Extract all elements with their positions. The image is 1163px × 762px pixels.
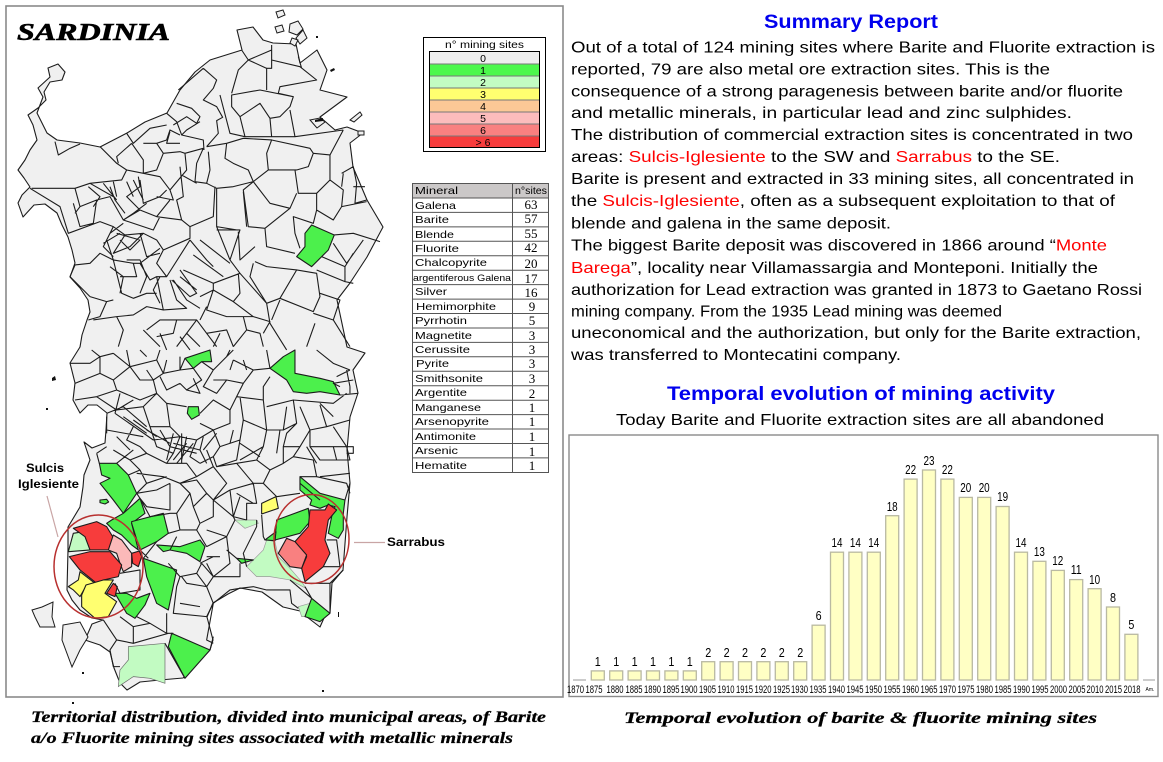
municipal boundaries, north	[30, 45, 380, 350]
bar chart: mining sites by year: 1	[650, 654, 656, 669]
leader line: Sulcis Iglesiente	[47, 496, 58, 537]
legend: number of mining sites	[424, 38, 546, 152]
bar chart: mining sites by year: 2	[724, 645, 730, 660]
bar chart: mining sites by year: 13	[1034, 544, 1045, 559]
bar chart: mining sites by year: 1960	[902, 684, 919, 696]
text block: summary report: the Sulcis-Iglesiente , often as a subsequent exploitation to that of	[571, 193, 1116, 210]
leader line: Sarrabus	[354, 542, 385, 544]
bar chart: mining sites by year: 1	[687, 654, 693, 669]
text block: summary report: mining company. From the 1935 Lead mining was deemed	[571, 304, 1002, 320]
table: minerals and number of sites: Pyrrhotin	[415, 315, 467, 327]
bar chart: mining sites by year: 1955	[884, 684, 900, 696]
table: minerals and number of sites: 1	[529, 458, 535, 473]
map: Sardinia municipal areas	[18, 10, 383, 704]
bar chart: mining sites by year: 2005	[1068, 684, 1086, 696]
caption: chart: Temporal evolution of barite & fluorite mining sites	[624, 710, 1097, 727]
table: minerals and number of sites: 3	[529, 342, 535, 357]
legend: number of mining sites: > 6	[476, 137, 491, 149]
bar chart: mining sites by year: 1915	[736, 684, 753, 696]
table: minerals and number of sites: Magnetite	[415, 330, 472, 342]
bar chart: mining sites by year: 14	[1016, 535, 1026, 550]
island outline	[18, 27, 383, 690]
table: minerals and number of sites: 2	[529, 386, 535, 401]
caption: map: a/o Fluorite mining sites associated with metallic minerals	[31, 730, 513, 747]
table: minerals and number of sites: 1	[529, 429, 535, 444]
table: minerals and number of sites: Hemimorphite	[416, 301, 496, 313]
bar chart: mining sites by year: 2018	[1124, 684, 1140, 696]
bar chart: mining sites by year: 1	[668, 654, 674, 669]
table: minerals and number of sites: 1	[529, 400, 535, 415]
bar chart: mining sites by year: 1920	[754, 684, 772, 696]
bar chart: mining sites by year: 12	[1052, 553, 1063, 568]
label: Sulcis Iglesiente: Sulcis	[26, 461, 64, 475]
text block: summary report	[570, 40, 1155, 364]
text block: summary report: and metallic minerals, in particular lead and zinc sulphides.	[571, 105, 1072, 122]
table: minerals and number of sites: Arsenopyrite	[415, 416, 489, 428]
table: minerals and number of sites: Pyrite	[416, 358, 449, 370]
caption: map: Territorial distribution, divided into municipal areas, of Barite	[31, 709, 546, 726]
text block: summary report: blende and galena in the same deposit.	[571, 216, 891, 232]
bar chart: mining sites by year: 2	[705, 645, 711, 660]
text block: summary report: was transferred to Montecatini company.	[570, 347, 901, 364]
text block: summary report: The biggest Barite deposit was discovered in 1866 around “ Monte	[571, 238, 1107, 254]
table: minerals and number of sites: 5	[529, 313, 535, 328]
table: minerals and number of sites: 42	[524, 240, 538, 255]
caption: map	[31, 709, 546, 747]
bar chart: mining sites by year: 1	[595, 654, 601, 669]
municipal area: green, north-east	[297, 225, 334, 267]
bar chart: mining sites by year: 23	[924, 453, 934, 468]
bar chart: mining sites by year: 14	[850, 535, 861, 550]
text block: summary report: areas: Sulcis-Iglesiente to the SW and Sarrabus to the SE.	[571, 149, 1060, 166]
bar chart: mining sites by year: 1910	[718, 684, 734, 696]
legend: number of mining sites: 4	[480, 101, 486, 113]
label: Sulcis Iglesiente: Iglesiente	[18, 477, 79, 491]
callout: Sarrabus circle	[274, 494, 349, 584]
bar chart: mining sites by year: 2015	[1105, 684, 1122, 696]
legend: number of mining sites: 6	[480, 125, 486, 137]
bar chart: mining sites by year: 1980	[976, 684, 993, 696]
table: minerals and number of sites: 1	[529, 414, 535, 429]
table: minerals and number of sites: Manganese	[415, 402, 481, 414]
table: minerals and number of sites: Chalcopyrite	[415, 257, 487, 269]
table: minerals and number of sites: Galena	[415, 200, 456, 212]
bar chart: mining sites by year: 1940	[828, 684, 845, 696]
bar chart: mining sites by year: 1930	[791, 684, 808, 696]
bar chart: mining sites by year: 1950	[865, 684, 882, 696]
table: minerals and number of sites: 55	[524, 226, 538, 241]
bar chart: mining sites by year: 5	[1128, 617, 1134, 632]
bar chart: mining sites by year: 2	[742, 645, 748, 660]
table: minerals and number of sites: Mineral	[415, 185, 458, 197]
bar chart: mining sites by year: 2000	[1050, 684, 1067, 696]
table: minerals and number of sites: Fluorite	[415, 243, 459, 255]
text block: summary report: uneconomical and the authorization, but only for the Barite extraction,	[571, 325, 1141, 342]
bar chart: mining sites by year: 1870	[567, 684, 584, 696]
table: minerals and number of sites	[412, 184, 548, 473]
label: Sulcis Iglesiente	[18, 461, 79, 491]
bar chart: mining sites by year	[567, 453, 1155, 696]
panel: map frame	[6, 6, 563, 697]
bar chart: mining sites by year: 14	[832, 535, 842, 550]
bar chart: mining sites by year: 1	[613, 654, 619, 669]
table: minerals and number of sites: 57	[524, 211, 538, 226]
table: minerals and number of sites: 16	[524, 285, 538, 300]
table: minerals and number of sites: Silver	[415, 286, 448, 298]
bar chart: mining sites by year: 1885	[626, 684, 642, 696]
bar chart: mining sites by year: 18	[887, 499, 898, 514]
bar chart: mining sites by year: 10	[1089, 572, 1100, 587]
bar chart: mining sites by year: 8	[1110, 590, 1116, 605]
table: minerals and number of sites: n°sites	[515, 185, 547, 197]
islets and dots	[46, 36, 339, 704]
bar chart: mining sites by year: 1875	[586, 684, 602, 696]
text block: summary report: Barega ”, locality near Villamassargia and Monteponi. Initially the	[571, 260, 1098, 277]
table: minerals and number of sites: Barite	[415, 214, 449, 226]
bar chart: mining sites by year: 1990	[1013, 684, 1030, 696]
bar chart: mining sites by year: 1965	[920, 684, 938, 696]
legend: number of mining sites: 1	[480, 65, 486, 77]
bar chart: mining sites by year: 19	[997, 489, 1008, 504]
callout: Sulcis Iglesiente circle	[54, 515, 143, 618]
table: minerals and number of sites: 1	[529, 444, 535, 459]
legend: number of mining sites: 3	[480, 89, 486, 101]
table: minerals and number of sites: Hematite	[415, 460, 467, 472]
panel: bar chart frame	[569, 435, 1158, 696]
small islands	[32, 10, 364, 667]
bar chart: mining sites by year: 2	[760, 645, 766, 660]
table: minerals and number of sites: 20	[524, 256, 538, 271]
text block: summary report: authorization for Lead extraction was granted in 1873 to Gaetano Rossi	[571, 282, 1142, 299]
table: minerals and number of sites: 3	[529, 371, 535, 386]
bar chart: mining sites by year: 20	[979, 480, 990, 495]
table: minerals and number of sites: 9	[529, 299, 535, 314]
text block: summary report: reported, 79 are also metal ore extraction sites. This is the	[571, 62, 1050, 78]
table: minerals and number of sites: Argentite	[415, 387, 467, 399]
table: minerals and number of sites: Antimonite	[415, 431, 476, 443]
text block: summary report: consequence of a strong paragenesis between barite and/or fluorite	[571, 84, 1123, 100]
coloured municipalities, centre and south	[68, 350, 345, 687]
label: Sarrabus: Sarrabus	[387, 535, 445, 549]
table: minerals and number of sites: 3	[529, 328, 535, 343]
table: minerals and number of sites: Blende	[415, 229, 454, 241]
text block: summary report: Out of a total of 124 mining sites where Barite and Fluorite extraction is	[571, 40, 1155, 56]
subheading: abandoned sites: Today Barite and Fluorite extraction sites are all abandoned	[616, 412, 1104, 429]
bar chart: mining sites by year: 2	[779, 645, 785, 660]
bar chart: mining sites by year: 1970	[939, 684, 956, 696]
bar chart: mining sites by year: 1975	[958, 684, 974, 696]
bar chart: mining sites by year: 1900	[680, 684, 698, 696]
bar chart: mining sites by year: 2	[797, 645, 803, 660]
bar chart: mining sites by year: 1905	[699, 684, 716, 696]
text block: summary report: Barite is present and extracted in 33 mining sites, all concentrated in	[571, 171, 1134, 188]
table: minerals and number of sites: 63	[524, 197, 538, 212]
bar chart: mining sites by year: 1880	[606, 684, 624, 696]
bar chart: mining sites by year: 20	[960, 480, 971, 495]
bar chart: mining sites by year: 1995	[1032, 684, 1048, 696]
legend: number of mining sites: 2	[480, 77, 486, 89]
table: minerals and number of sites: 3	[529, 356, 535, 371]
text block: summary report: The distribution of commercial extraction sites is concentrated in two	[571, 127, 1133, 144]
table: minerals and number of sites: 17	[524, 271, 538, 286]
table: minerals and number of sites: Cerussite	[415, 344, 470, 356]
bar chart: mining sites by year: 22	[942, 462, 953, 477]
title: SARDINIA: SARDINIA	[17, 20, 170, 46]
bar chart: mining sites by year: 1935	[810, 684, 826, 696]
bar chart: mining sites by year: 1895	[662, 684, 680, 696]
heading: Temporal evolution of mining activity: Temporal evolution of mining activity	[667, 384, 1055, 405]
bar chart: mining sites by year: 6	[816, 608, 822, 623]
bar chart: mining sites by year: 1945	[846, 684, 864, 696]
bar chart: mining sites by year: 1890	[644, 684, 661, 696]
table: minerals and number of sites: Arsenic	[415, 445, 458, 457]
bar chart: mining sites by year: 11	[1071, 562, 1082, 577]
legend: number of mining sites: 5	[480, 113, 486, 125]
legend: number of mining sites: n° mining sites	[445, 40, 524, 51]
bar chart: mining sites by year: Am.	[1146, 687, 1154, 693]
heading: Summary Report: Summary Report	[764, 12, 939, 33]
municipal boundaries, south	[70, 350, 358, 678]
bar chart: mining sites by year: 2010	[1086, 684, 1104, 696]
bar chart: mining sites by year: 1985	[994, 684, 1012, 696]
bar chart: mining sites by year: 22	[905, 462, 916, 477]
bar chart: mining sites by year: 1	[632, 654, 638, 669]
bar chart: mining sites by year: 14	[868, 535, 879, 550]
bar chart: mining sites by year: 1925	[773, 684, 790, 696]
legend: number of mining sites: 0	[480, 53, 486, 65]
table: minerals and number of sites: Smithsonite	[415, 373, 483, 385]
table: minerals and number of sites: argentiferous Galena	[413, 273, 512, 284]
